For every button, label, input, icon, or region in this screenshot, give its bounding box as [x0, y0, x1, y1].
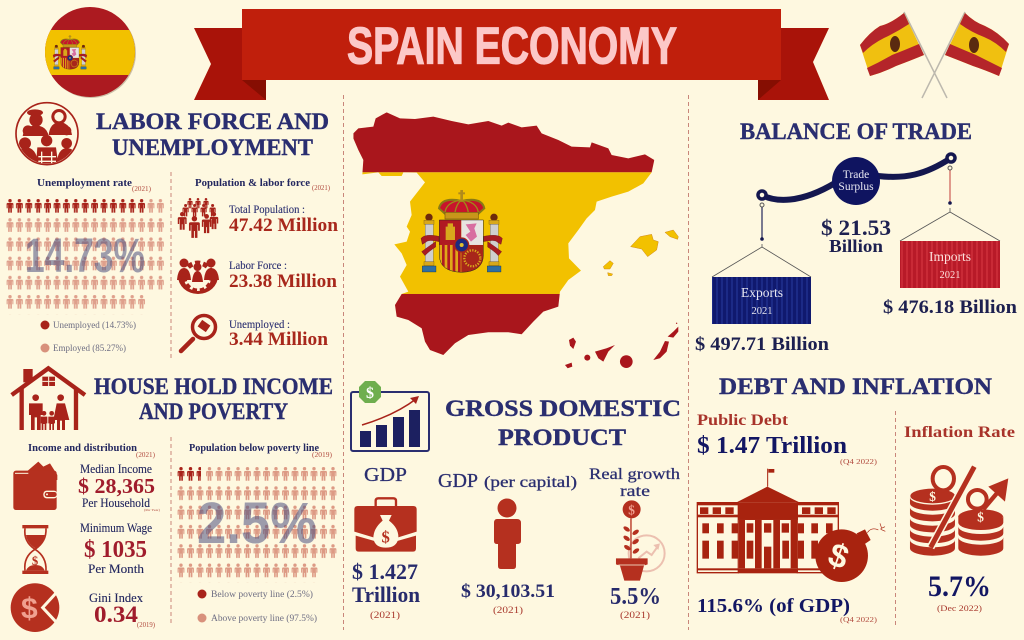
per household: Per Household [82, 495, 150, 510]
ribbon main [242, 9, 781, 80]
icon: coins and percent [910, 467, 1008, 556]
icon: coins and percent: $ [977, 510, 984, 525]
minimum wage value: $ 1035 [84, 537, 147, 563]
trade surplus circle: Surplus [838, 181, 874, 193]
label: gdp: GDP [364, 464, 407, 486]
heading: GROSS DOMESTIC [445, 396, 681, 421]
trade surplus circle: Trade [843, 169, 869, 181]
label: gdp per capita: (per capital) [484, 474, 577, 491]
icon: person [494, 498, 521, 569]
label: gdp per capita [438, 470, 577, 492]
icon: workers circle [15, 103, 79, 165]
icon: gdp chart [351, 381, 429, 451]
panel: gross domestic product [351, 381, 681, 620]
label: inflation rate: Inflation Rate [904, 424, 1015, 441]
value: growth: 5.5% [610, 584, 661, 610]
panel: debt and inflation [697, 374, 1015, 624]
heading line 2: UNEMPLOYMENT [112, 135, 313, 160]
date: (Q4 2022) [840, 457, 878, 466]
map of Spain [353, 112, 679, 368]
icon: crossed flags [860, 12, 1009, 98]
icon: government building with bomb: $ [823, 536, 854, 577]
exports container: 2021 [752, 306, 772, 317]
gini value: 0.34 [94, 602, 139, 627]
heading: DEBT AND INFLATION [719, 374, 992, 399]
ribbon left tail [194, 28, 266, 100]
icon: government building with bomb [697, 469, 885, 582]
year: (2021) [370, 610, 400, 620]
median income label: Median Income [80, 461, 152, 476]
title banner [194, 9, 829, 100]
heading: BALANCE OF TRADE [740, 119, 972, 144]
gini label: Gini Index [89, 590, 143, 605]
label: labor force: Labor Force : [229, 258, 287, 272]
heading: LABOR FORCE AND [96, 109, 329, 134]
panel: household income and poverty [11, 368, 339, 632]
imports container: Imports [929, 249, 971, 264]
ribbon left fold [242, 80, 266, 100]
year: (2021) [312, 184, 331, 192]
icon: round Spanish flag [45, 7, 136, 98]
icon: magnifier [181, 316, 216, 351]
value: imports: $ 476.18 Billion [883, 297, 1017, 318]
icon: hourglass: $ [32, 554, 38, 568]
panel: labor force and unemployment [6, 103, 338, 353]
value: total population: 47.42 Million [229, 215, 338, 236]
legend: Unemployed (14.73%) [53, 320, 136, 330]
value: public debt: $ 1.47 Trillion [697, 433, 847, 459]
date: (Q4 2022) [840, 615, 878, 624]
icon: briefcase: $ [381, 528, 390, 547]
year: (2019) [137, 621, 156, 629]
year: (2021) [620, 610, 650, 620]
exports container: Exports [741, 285, 783, 300]
coat of arms [421, 190, 502, 273]
icon: growing plant: $ [628, 502, 635, 517]
subheading: population: Population & labor force [195, 177, 310, 189]
big figure: 14.73% [25, 230, 145, 283]
panel: balance of trade [695, 119, 1017, 355]
heading line 2: PRODUCT [498, 425, 626, 450]
icon: gdp chart: $ [366, 385, 374, 402]
value: unemployed: 3.44 Million [229, 329, 328, 350]
label: total population: Total Population : [229, 202, 305, 216]
value unit: Billion [829, 236, 883, 256]
pictogram: poverty [177, 467, 338, 583]
title: SPAIN ECONOMY [347, 18, 677, 76]
label: unemployed: Unemployed : [229, 317, 290, 331]
ribbon right tail [758, 28, 829, 100]
legend [198, 589, 317, 623]
big figure: 2.5% [197, 491, 317, 556]
trade surplus circle [832, 157, 880, 205]
icon: briefcase [354, 498, 417, 552]
mainland in flag colours [353, 112, 654, 355]
per year: (Per Year) [144, 508, 160, 512]
crane rope and hooks [712, 154, 1000, 277]
icon: gini [11, 583, 59, 632]
date: (Dec 2022) [937, 604, 982, 613]
icon: coins and percent: $ [929, 489, 936, 504]
per month: Per Month [88, 561, 145, 576]
ribbon right fold [758, 80, 781, 100]
subheading: income: Income and distribution [28, 442, 137, 454]
legend: Above poverty line (97.5%) [211, 613, 317, 623]
value: debt to gdp: 115.6% (of GDP) [697, 595, 850, 617]
right flag [945, 13, 1009, 76]
value unit: Trillion [352, 582, 420, 607]
section dividers [171, 95, 896, 630]
flag poles [904, 12, 965, 98]
label: real growth: Real growth [589, 466, 680, 483]
legend [40, 320, 136, 353]
legend: Below poverty line (2.5%) [211, 589, 313, 599]
year: (2021) [132, 185, 152, 193]
year: (2021) [136, 451, 156, 459]
label: public debt: Public Debt [697, 412, 789, 429]
heading: HOUSE HOLD INCOME [94, 374, 333, 399]
icon: labor gear [177, 258, 219, 294]
label: gdp per capita: GDP [438, 470, 478, 492]
minimum wage label: Minimum Wage [80, 520, 152, 535]
icon: hourglass [22, 525, 48, 574]
subheading: poverty: Population below poverty line [189, 442, 319, 454]
balearic islands [603, 230, 678, 276]
heading line 2: AND POVERTY [139, 399, 288, 424]
icon: gini: $ [21, 592, 38, 625]
exports container [712, 277, 811, 324]
icon: growing plant [616, 500, 665, 581]
median income value: $ 28,365 [78, 474, 155, 498]
subheading: unemployment rate: Unemployment rate [37, 177, 132, 189]
icon: house with family [12, 368, 85, 430]
pictogram: unemployment [6, 199, 166, 314]
value: labor force: 23.38 Million [229, 271, 337, 292]
icon: crowd [178, 198, 218, 238]
imports container: 2021 [940, 270, 960, 281]
label: rate: rate [620, 483, 650, 500]
year: (2019) [312, 451, 333, 459]
value: exports: $ 497.71 Billion [695, 334, 829, 355]
left flag [860, 13, 924, 76]
icon: wallet [13, 462, 57, 510]
value: surplus: $ 21.53 [821, 215, 891, 240]
value: inflation: 5.7% [928, 570, 991, 603]
legend: Employed (85.27%) [53, 343, 126, 353]
value: gdp: $ 1.427 [352, 559, 418, 584]
canary islands [565, 323, 678, 368]
year: (2021) [493, 605, 523, 615]
imports container [900, 241, 1000, 288]
value: gdp per capita: $ 30,103.51 [461, 581, 555, 602]
